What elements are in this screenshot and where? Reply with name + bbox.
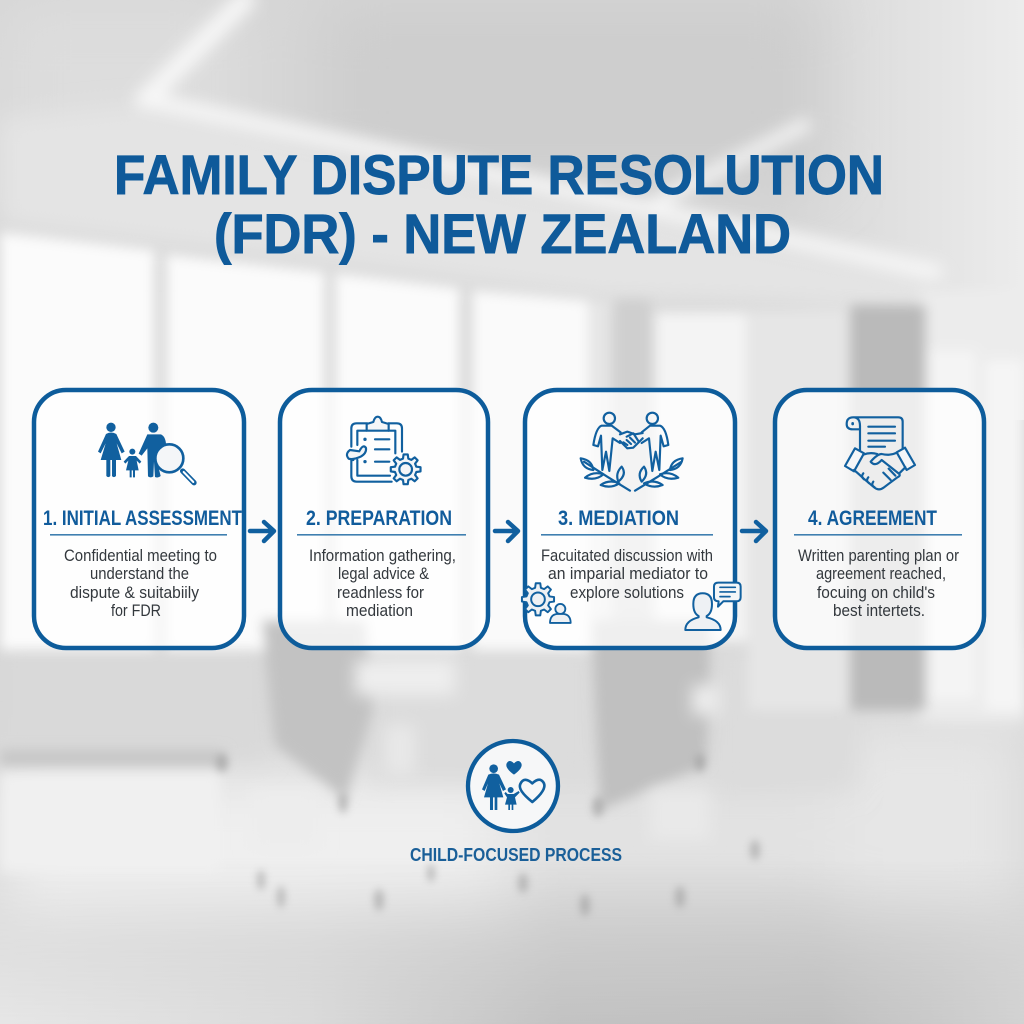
icon: scroll and handshake [845,417,915,489]
panel: step 3 mediation [522,390,741,648]
badge: child-focused process [410,741,622,865]
description [798,547,959,620]
area below ceiling strip [0,105,935,310]
panel: step 1 initial assessment [34,390,244,648]
description: explore solutions [570,584,684,602]
label: CHILD-FOCUSED PROCESS [410,844,622,865]
icon: gear and person [522,583,571,623]
title: FAMILY DISPUTE RESOLUTION [114,143,884,206]
icon: clipboard and gear [347,417,421,484]
description: dispute & suitabiily [70,584,200,602]
icon: family with magnifying glass [98,423,194,483]
title [114,143,884,265]
arrow: step 3 to 4 [742,522,766,541]
description: readnless for [337,584,424,602]
description [64,547,217,620]
chairs [262,620,372,800]
panel: step 4 agreement [775,390,984,648]
description: for FDR [111,602,161,620]
heading: 3. MEDIATION [558,507,679,530]
description: legal advice & [338,565,429,583]
heading: 2. PREPARATION [306,507,452,530]
arrow: step 2 to 3 [495,522,518,541]
heading: 4. AGREEMENT [808,507,937,530]
description: Confidential meeting to [64,547,217,565]
panel: step 2 preparation [280,390,488,648]
description: mediation [346,602,413,620]
description [541,547,713,602]
description: Information gathering, [309,547,456,565]
title: (FDR) - NEW ZEALAND [214,202,791,265]
description: Written parenting plan or [798,547,959,565]
arrow: step 1 to 2 [250,522,274,541]
icon: parent, child and hearts in circle [468,741,558,831]
icon: person with speech bubble [685,583,741,630]
heading: 1. INITIAL ASSESSMENT [43,507,242,530]
description: best intertets. [833,602,925,620]
description: understand the [90,565,189,583]
icon: two people shaking hands with laurels [581,413,683,491]
description: focuing on child's [817,584,935,602]
description [309,547,456,620]
description: Facuitated discussion with [541,547,713,565]
description: an imparial mediator to [548,565,708,583]
description: agreement reached, [816,565,946,583]
windows [0,232,155,650]
